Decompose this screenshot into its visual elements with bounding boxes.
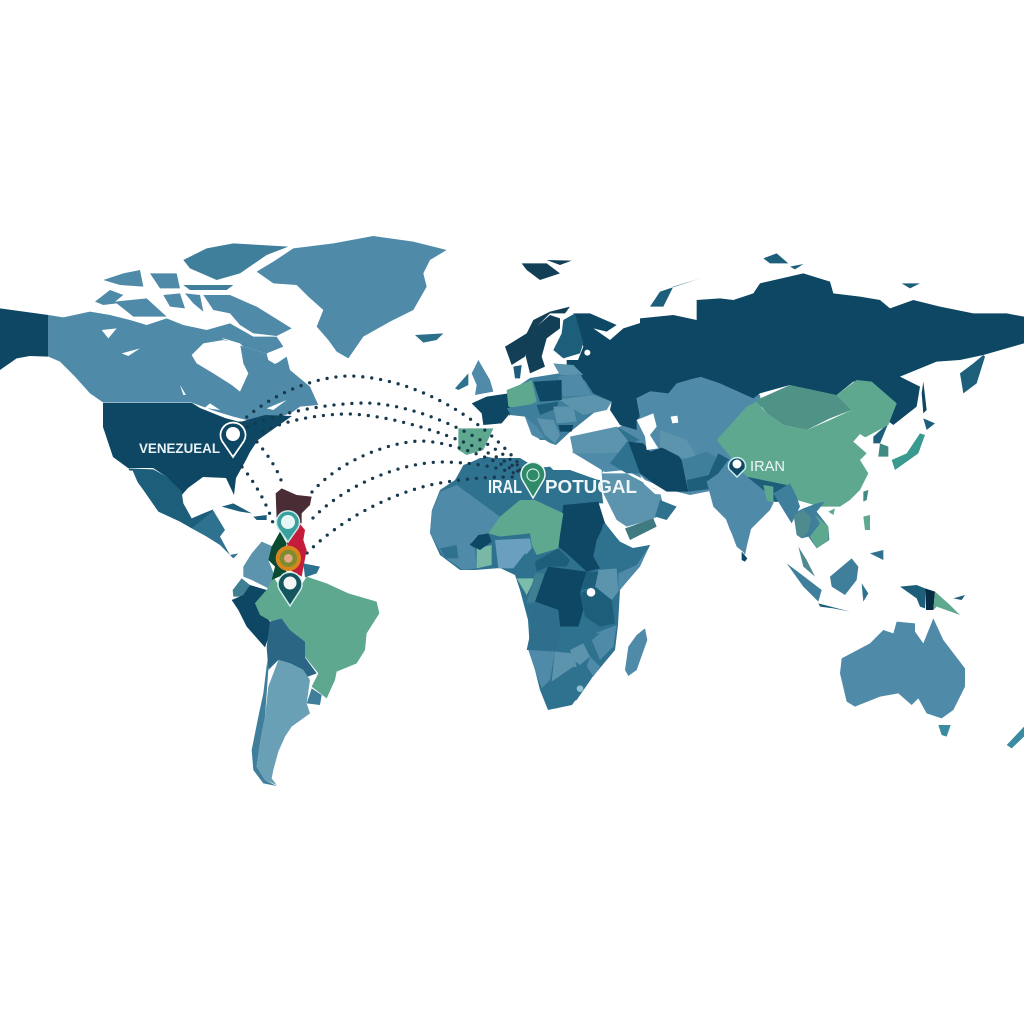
country: madagascar — [625, 628, 647, 676]
pin: venezuela label — [139, 423, 245, 457]
country: belarus — [558, 373, 592, 397]
country: ukraine — [558, 395, 612, 415]
map: asia — [640, 253, 1024, 507]
country: mexico — [128, 468, 213, 528]
great lakes and inland water — [102, 328, 287, 412]
country: pakistan — [687, 453, 730, 492]
flag-shaped country: portugal overlay — [268, 488, 312, 580]
country: vietnam — [810, 515, 828, 548]
flag dark top — [276, 488, 312, 523]
country: angola — [527, 603, 560, 650]
country: sumatra — [787, 563, 822, 602]
country: denmark — [513, 365, 522, 378]
arctic islands — [203, 295, 292, 336]
country: tasmania — [938, 725, 951, 737]
country: ethiopia — [593, 523, 650, 568]
country: botswana — [552, 652, 577, 682]
country: thailand — [794, 510, 812, 537]
pin: teal marker — [276, 511, 300, 542]
country: greenland — [257, 236, 447, 358]
country: united states — [103, 403, 292, 497]
country: kamchatka — [960, 355, 985, 393]
country: romania — [553, 407, 577, 423]
pin: venezuela label: VENEZUEAL — [139, 440, 220, 456]
country: sudan — [558, 502, 605, 572]
country: sweden — [525, 315, 560, 373]
country: norway — [505, 307, 570, 365]
hispaniola — [253, 515, 267, 520]
country: ireland — [455, 373, 468, 390]
country: spain — [458, 428, 493, 455]
country: guyana — [303, 563, 320, 577]
country: poland — [533, 380, 562, 402]
country: gabon — [517, 578, 535, 595]
map: europe and middle east — [505, 260, 650, 380]
country: iceland — [415, 333, 443, 343]
country: yemen — [625, 518, 657, 540]
country: somalia — [618, 545, 650, 592]
hudson bay — [192, 340, 248, 392]
country: nigeria — [495, 538, 532, 568]
country: central europe — [507, 403, 552, 417]
country: chile — [252, 660, 277, 786]
country: finland — [553, 313, 583, 358]
country: uruguay — [307, 688, 322, 705]
country: taiwan — [863, 490, 868, 502]
country: malaysia — [798, 547, 815, 577]
asia base silhouette — [572, 377, 775, 555]
country: tanzania — [580, 587, 615, 627]
country: france — [472, 393, 510, 425]
himalaya strip — [745, 475, 802, 502]
map: north america — [0, 236, 447, 420]
northern hudson bay land — [203, 323, 283, 353]
country: niger and chad — [488, 500, 563, 555]
country: colombia — [243, 542, 275, 588]
country: iraq — [610, 440, 640, 473]
country: burkina faso — [470, 533, 492, 550]
country: bangladesh bhutan — [763, 485, 773, 503]
country: slovakia hungary — [537, 402, 558, 415]
country: brazil — [255, 577, 379, 698]
country: congo — [527, 573, 547, 603]
flag green band — [268, 532, 287, 580]
europe base silhouette — [505, 370, 612, 445]
ungava bay — [267, 354, 282, 364]
country: indochina — [793, 502, 829, 548]
country: west coast — [430, 530, 477, 570]
central america — [192, 511, 238, 558]
country: ghana togo — [477, 545, 492, 568]
pin: portugal label: POTUGAL — [545, 477, 637, 497]
country: syria jordan — [602, 452, 628, 473]
map: southeast asia and oceania — [742, 483, 1024, 748]
country: java — [818, 603, 850, 612]
country: afghanistan — [682, 452, 718, 480]
country: ecuador — [233, 578, 250, 597]
country: kazakhstan — [637, 377, 757, 457]
country: oman — [655, 500, 677, 520]
country: russia north west — [573, 313, 650, 380]
country: zambia — [558, 627, 593, 650]
country: balkans — [537, 418, 560, 443]
country: india — [707, 460, 770, 553]
pin: brazil marker — [278, 572, 302, 606]
country: svalbard — [522, 260, 572, 280]
country: saudi arabia — [602, 473, 665, 527]
country: sakhalin — [922, 382, 927, 413]
persian gulf — [640, 475, 668, 495]
country: guinea — [440, 545, 458, 558]
country: uzbekistan turkmenistan — [660, 430, 697, 458]
country: kenya — [595, 568, 618, 600]
map: africa — [430, 485, 650, 708]
map: south america — [232, 577, 379, 786]
flag red band — [287, 520, 307, 577]
country: new guinea west — [900, 585, 925, 608]
country: zimbabwe — [570, 643, 590, 665]
country: borneo — [830, 558, 858, 595]
mediterranean sea — [500, 415, 553, 445]
cuba — [222, 503, 252, 513]
pin: iran label: IRAN — [750, 458, 785, 475]
country: mauritania and mali — [430, 485, 500, 570]
country: russia east — [640, 273, 1024, 425]
baja california gap — [128, 471, 147, 503]
country: iran — [628, 442, 688, 492]
country: mozambique — [587, 625, 617, 677]
country: cameroon — [513, 553, 537, 577]
country: peru — [232, 585, 270, 647]
country: argentina — [257, 660, 310, 785]
central america and caribbean — [128, 468, 320, 588]
country: germany — [507, 380, 537, 408]
country: uk — [472, 360, 493, 395]
new britain — [953, 595, 965, 600]
country: sulawesi — [862, 583, 868, 602]
white sea — [584, 350, 590, 356]
country: south africa — [542, 667, 592, 708]
country: caucasus — [617, 427, 640, 443]
country: japan — [892, 433, 925, 470]
country: papua new guinea — [933, 592, 960, 615]
country: alaska — [0, 308, 48, 370]
country: turkey — [570, 427, 628, 453]
country: novaya zemlya — [650, 278, 700, 307]
country: dr congo — [535, 567, 587, 627]
country: lesotho — [577, 685, 583, 692]
country: philippines — [863, 515, 870, 530]
bohai sea — [853, 434, 867, 447]
pin: iran label — [728, 458, 785, 477]
country: algeria — [453, 457, 523, 513]
country: uganda — [582, 572, 598, 590]
country: libya — [520, 467, 567, 503]
country: sri lanka — [742, 552, 747, 562]
country: namibia — [528, 650, 555, 688]
flag emblem — [276, 546, 301, 571]
country: estonia latvia lithuania — [553, 363, 583, 375]
country: canada — [48, 312, 318, 420]
pin: portugal label: IRAL — [488, 477, 522, 497]
russian arctic islands — [763, 253, 920, 288]
country: central african republic — [535, 548, 570, 572]
country: china — [717, 380, 897, 507]
country: egypt — [567, 477, 603, 503]
country: bulgaria — [558, 425, 573, 432]
country: new guinea stripe — [925, 588, 935, 610]
africa base silhouette — [430, 458, 650, 710]
dotted route arcs — [240, 376, 520, 553]
country: korea — [873, 423, 888, 443]
lake victoria — [587, 588, 595, 597]
country: russia west — [567, 360, 753, 430]
country: bolivia and paraguay — [267, 618, 317, 678]
country: hokkaido — [923, 418, 935, 430]
country: italy — [525, 417, 545, 438]
country: myanmar — [773, 483, 800, 523]
country: hainan — [828, 508, 835, 515]
country: new zealand — [1007, 727, 1024, 748]
aral sea and caspian sea — [637, 413, 678, 450]
country: australia — [840, 618, 965, 718]
country: mongolia — [757, 385, 852, 430]
pin: portugal label — [488, 462, 637, 498]
